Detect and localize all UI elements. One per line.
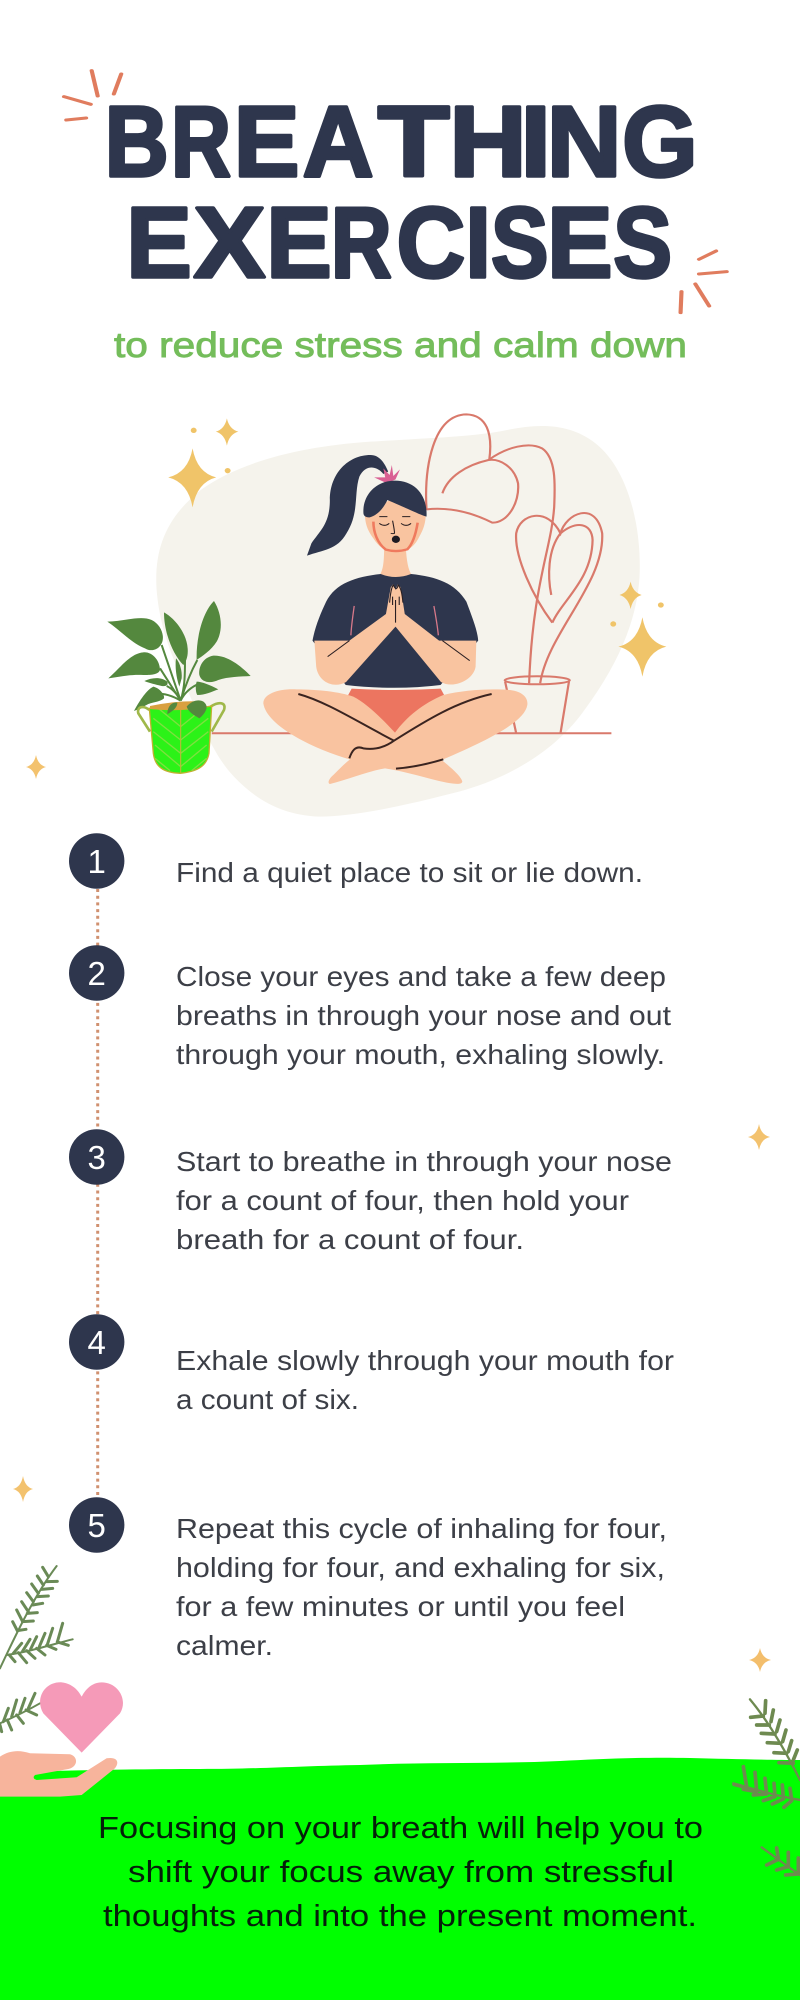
leg lines [298,694,492,769]
step 5 text: calmer. [176,1630,273,1661]
title: G [622,86,698,198]
legs [263,689,527,784]
step 5 text: Repeat this cycle of inhaling for four, [176,1513,667,1544]
title: X [194,186,265,298]
footer message: thoughts and into the present moment. [103,1898,697,1933]
sparkles [168,418,666,677]
title: E [126,186,192,298]
woman crossed legs [263,689,527,784]
neck [380,548,412,578]
title: E [266,186,332,298]
step 3 text: Start to breathe in through your nose [176,1146,672,1177]
title: R [171,86,231,198]
step 2 text [176,961,671,1070]
potted plant [107,601,251,773]
number badge 2: 2 [88,955,106,992]
icon: open hand [0,1751,117,1797]
footer message: shift your focus away from stressful [128,1854,674,1889]
icon: sparkle left lower [13,1476,33,1502]
footer green band [0,1758,800,2000]
step 1 [69,833,643,889]
title: B [105,86,169,198]
step 3 text: breath for a count of four. [176,1224,524,1255]
step 5 text: holding for four, and exhaling for six, [176,1552,665,1583]
title: N [547,86,622,198]
icon: sparkle bottom right [749,1648,771,1672]
hair tie [374,465,400,483]
step 4 text: a count of six. [176,1384,359,1415]
number badge 5 [69,1497,124,1553]
arms and hands [314,584,476,685]
shirt [313,574,478,688]
step 4 [69,1314,674,1415]
icon: title burst marks [64,71,727,313]
title [105,86,698,298]
number badge 3: 3 [88,1139,106,1176]
mouth [392,536,400,543]
right fern branches [733,1699,800,1875]
icon: sparkle right [748,1124,770,1150]
illustration: meditating woman with plants [107,414,666,817]
arm lines [328,585,470,661]
step 1 text: Find a quiet place to sit or lie down. [176,857,643,888]
dotted timeline [96,889,99,1500]
pot rim soil [150,701,205,710]
step 4 text: Exhale slowly through your mouth for [176,1345,674,1376]
cheek marks [373,522,418,551]
title: A [303,86,374,198]
pot handles [138,703,224,732]
outline plant and pot [212,414,611,733]
title: S [613,186,672,298]
number badge 4: 4 [88,1324,106,1361]
shorts [348,689,445,734]
icon: pink heart [40,1682,123,1753]
step 2 text: Close your eyes and take a few deep [176,961,666,992]
footer message [98,1810,703,1933]
title: I [521,86,551,198]
icon: sparkle left upper [26,755,46,779]
number badge 4 [69,1314,124,1370]
pot centre vein [179,710,182,773]
face [379,517,411,534]
subtitle: to reduce stress and calm down [114,326,687,365]
number badge 5: 5 [88,1507,106,1544]
footer message: Focusing on your breath will help you to [98,1810,703,1845]
step 3 text [176,1146,672,1255]
hair [363,481,427,517]
green pot [149,706,212,773]
number badge 1 [69,833,124,889]
plant stems [155,645,200,701]
title: E [547,186,613,298]
step 5 text [176,1513,667,1661]
step 2 text: breaths in through your nose and out [176,1000,671,1031]
left fern branches [0,1566,73,1732]
step 5 [69,1497,667,1661]
background blob [156,426,640,817]
number badge 2 [69,945,124,1001]
number badge 1: 1 [88,843,106,880]
title: T [378,86,450,198]
title: R [331,186,392,298]
step 3 text: for a count of four, then hold your [176,1185,629,1216]
title: I [466,186,491,298]
step 2 [69,945,671,1070]
head [365,497,426,552]
ponytail [307,455,388,556]
title: H [450,86,527,198]
pot pattern [153,708,208,771]
title: E [234,86,299,198]
lower leaves [167,700,207,718]
number badge 3 [69,1129,124,1185]
step 3 [69,1129,672,1255]
sleeve creases [351,606,438,635]
step 2 text: through your mouth, exhaling slowly. [176,1039,665,1070]
plant leaves [107,601,251,711]
step 4 text [176,1345,674,1415]
step 5 text: for a few minutes or until you feel [176,1591,625,1622]
woman upper body [307,455,478,688]
title: S [491,186,548,298]
title: C [397,186,465,298]
